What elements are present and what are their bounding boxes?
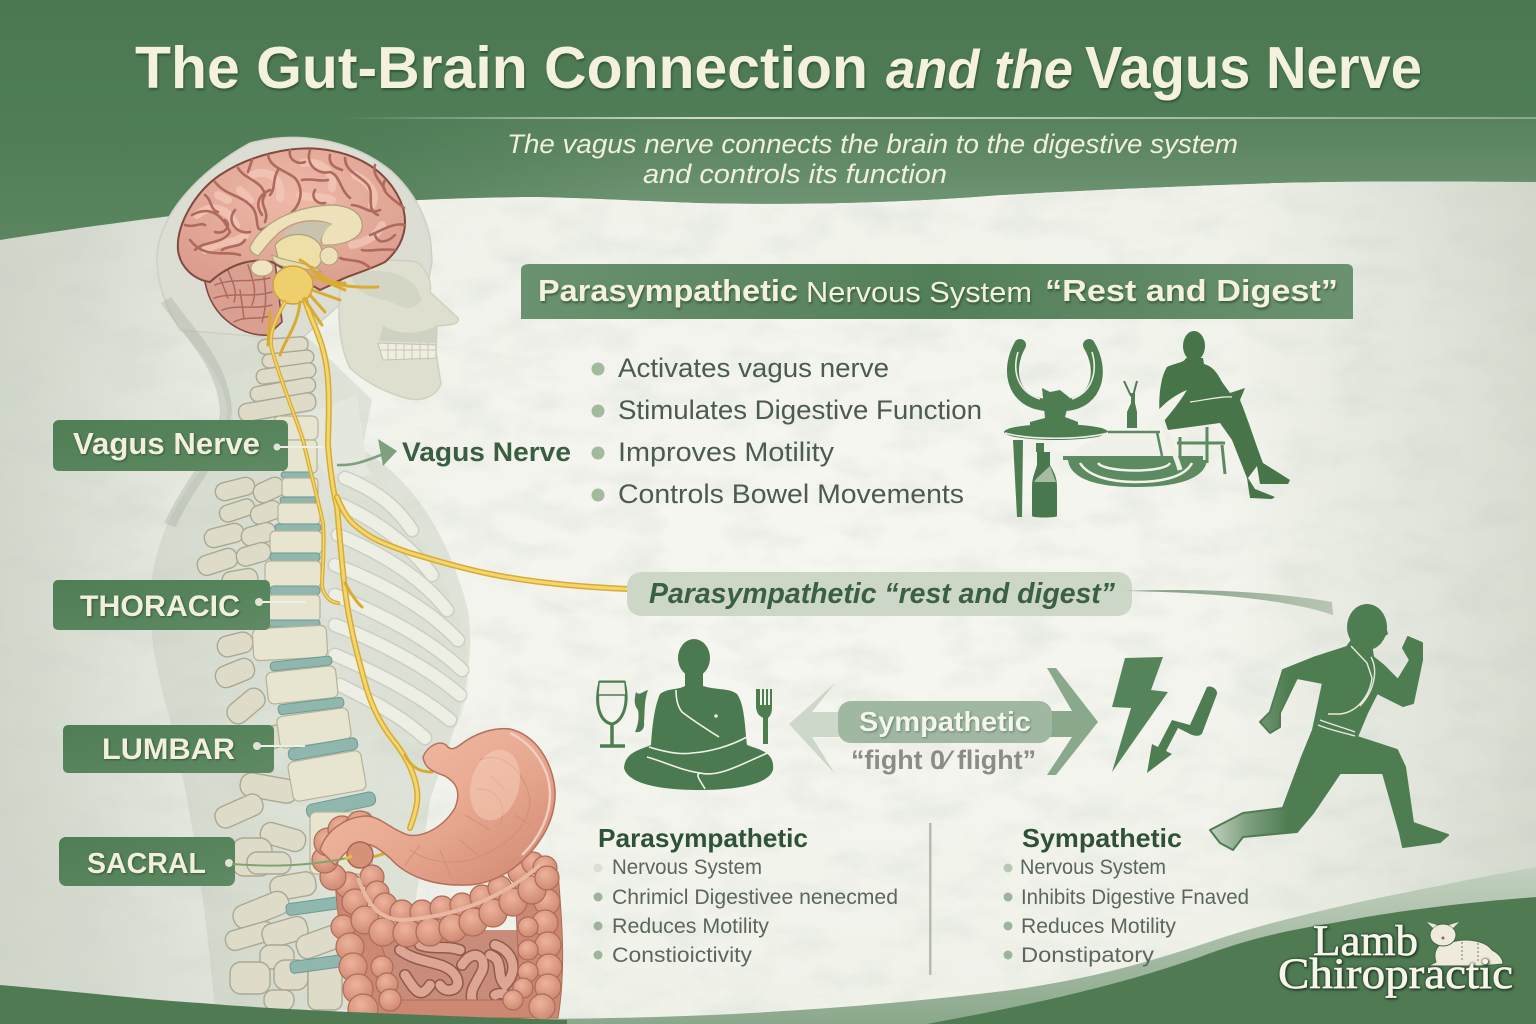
logo: Lamb Chiropractic [1278, 918, 1513, 998]
banner: parasympathetic heading: Parasympathetic [538, 273, 798, 308]
horseshoe ornament [1013, 345, 1097, 405]
icon: meditating figure [598, 639, 773, 790]
icon: lamb [1427, 922, 1503, 966]
list: parasympathetic: Constioictivity [612, 944, 753, 967]
label: Lumbar: LUMBAR [102, 733, 235, 766]
label: Vagus Nerve: Vagus Nerve [73, 426, 260, 461]
small vase [1127, 393, 1137, 428]
bullet list: parasympathetic effects: Controls Bowel Movements [618, 479, 964, 509]
logo: Lamb Chiropractic: Lamb [1313, 918, 1418, 965]
logo: Lamb Chiropractic: Chiropractic [1278, 951, 1513, 998]
vagus nerve callout text: Vagus Nerve [402, 437, 571, 467]
label: Sacral: SACRAL [87, 848, 206, 880]
pill: rest and digest: Parasympathetic “rest and digest” [649, 578, 1115, 610]
subtitle: The vagus nerve connects the brain to the digestive system [507, 129, 1238, 159]
banner: parasympathetic heading [521, 264, 1353, 319]
wine glass [598, 682, 626, 746]
thalamus [275, 234, 322, 268]
icon: running figure [1210, 604, 1448, 850]
body silhouette [150, 137, 470, 1010]
label: Sacral [59, 837, 352, 886]
skull [339, 260, 458, 399]
title: The Gut-Brain Connection [135, 35, 868, 101]
cerebellum [205, 259, 282, 335]
stomach [320, 729, 555, 885]
leaf [635, 690, 648, 732]
list: sympathetic: Inhibits Digestive Fnaved [1021, 886, 1249, 909]
icon: lightning bolt [1112, 657, 1168, 772]
bullet list: parasympathetic effects: Stimulates Digestive Function [618, 395, 982, 425]
list: parasympathetic: Nervous System [612, 856, 762, 879]
banner: parasympathetic heading: “Rest and Digest” [1045, 273, 1338, 308]
body [678, 639, 710, 677]
icon: seated person dining at table [1004, 331, 1290, 518]
list: sympathetic: Sympathetic [1022, 823, 1182, 853]
fork [756, 689, 772, 744]
cervical vertebrae [237, 336, 318, 440]
large intestine [312, 811, 563, 1024]
brain [178, 148, 405, 335]
person [1183, 331, 1205, 361]
list: parasympathetic: Reduces Motility [612, 915, 770, 938]
subtitle [507, 129, 1238, 189]
arrow: swoosh to runner [1125, 590, 1333, 615]
label: Thoracic: THORACIC [80, 590, 240, 623]
chair [1177, 427, 1225, 474]
list: sympathetic: Donstipatory [1021, 944, 1155, 967]
vagus nerves [268, 260, 628, 857]
list: sympathetic [1004, 823, 1249, 967]
vertebra bodies and discs [252, 440, 377, 974]
pill: sympathetic: Sympathetic [859, 706, 1031, 737]
pill: rest and digest [627, 572, 1132, 616]
arrow: vagus nerve callout [337, 439, 397, 466]
spine [195, 336, 377, 1010]
label: Lumbar [63, 725, 305, 773]
divider [929, 823, 932, 975]
ribcage [335, 473, 468, 738]
bottom green band [0, 867, 1536, 1024]
bullet list: parasympathetic effects [592, 353, 982, 509]
banner: parasympathetic heading: Nervous System [806, 277, 1032, 309]
small intestine [372, 930, 530, 1014]
table [1004, 424, 1108, 440]
subtitle: and controls its function [643, 159, 947, 189]
cerebrum [178, 148, 405, 290]
list: sympathetic: Reduces Motility [1021, 915, 1176, 938]
label: Vagus Nerve [53, 420, 324, 471]
list: parasympathetic [594, 823, 898, 967]
bullet list: parasympathetic effects: Improves Motility [618, 437, 835, 467]
bottle [1032, 452, 1057, 518]
list: parasympathetic: Parasympathetic [598, 823, 808, 853]
label: Thoracic [53, 580, 306, 630]
title [135, 35, 1422, 101]
brainstem ball [273, 266, 313, 304]
top green header band [0, 0, 1536, 240]
double arrow: sympathetic [789, 668, 1098, 775]
bullet list: parasympathetic effects: Activates vagus nerve [618, 353, 889, 383]
bowl [1068, 460, 1207, 487]
list: parasympathetic: Chrimicl Digestivee nenecmed [612, 886, 898, 909]
corpus callosum [250, 205, 362, 256]
fight or flight text: “fight 0⁄ flight” [851, 745, 1036, 775]
title: and the [886, 38, 1073, 100]
title: Vagus Nerve [1085, 35, 1422, 101]
list: sympathetic: Nervous System [1020, 856, 1166, 879]
icon: small pen arrow [1147, 687, 1217, 773]
spinous processes [195, 474, 347, 1010]
pill: sympathetic [838, 701, 1052, 743]
